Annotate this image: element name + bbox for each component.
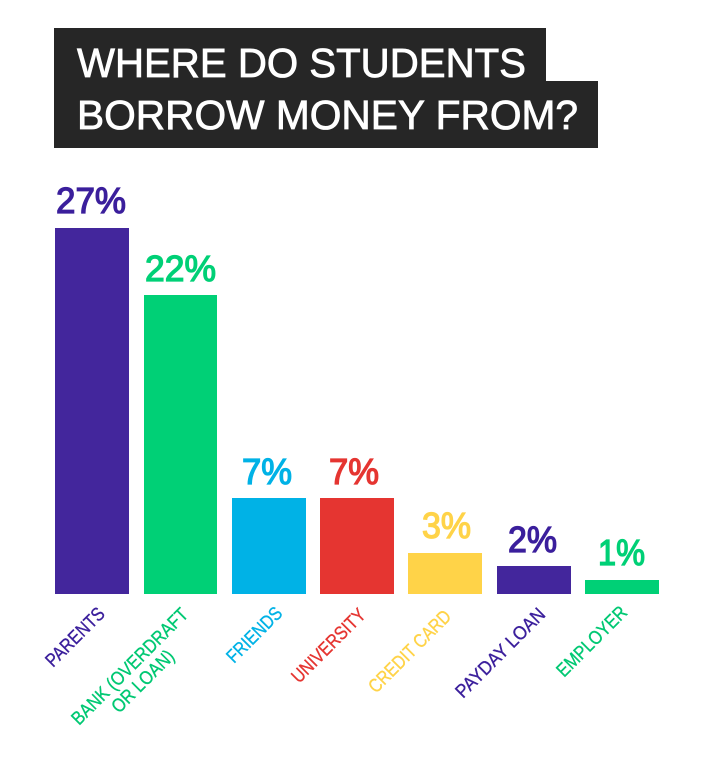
- bar: employer: [553, 532, 659, 682]
- bar: employer: EMPLOYER: [553, 602, 632, 682]
- bar: parents: 27%: [56, 180, 126, 221]
- title: [54, 28, 598, 148]
- title: BORROW MONEY FROM?: [77, 92, 578, 138]
- bar: credit card: CREDIT CARD: [365, 606, 456, 698]
- bar: university: 7%: [329, 451, 379, 492]
- bar: bank: [68, 248, 217, 730]
- bar: parents: PARENTS: [42, 604, 110, 672]
- bar: parents: [42, 180, 129, 672]
- bar: payday loan: PAYDAY LOAN: [452, 604, 550, 703]
- bar: friends: 7%: [242, 451, 292, 492]
- bar: credit card: 3%: [422, 505, 471, 546]
- bar: payday loan: 2%: [508, 519, 557, 560]
- bar: bank: BANK (OVERDRAFT: [68, 604, 193, 730]
- bar: friends: [223, 451, 306, 668]
- bar: payday loan: [452, 519, 571, 703]
- bar: employer: 1%: [598, 532, 645, 573]
- bar: bank: OR LOAN): [108, 646, 179, 718]
- bar: credit card: [365, 505, 482, 698]
- title: WHERE DO STUDENTS: [77, 40, 526, 86]
- bar chart: [42, 180, 659, 730]
- bar: university: UNIVERSITY: [288, 605, 371, 688]
- bar: friends: FRIENDS: [223, 603, 287, 668]
- bar: university: [288, 451, 394, 688]
- bar: bank: 22%: [145, 248, 216, 289]
